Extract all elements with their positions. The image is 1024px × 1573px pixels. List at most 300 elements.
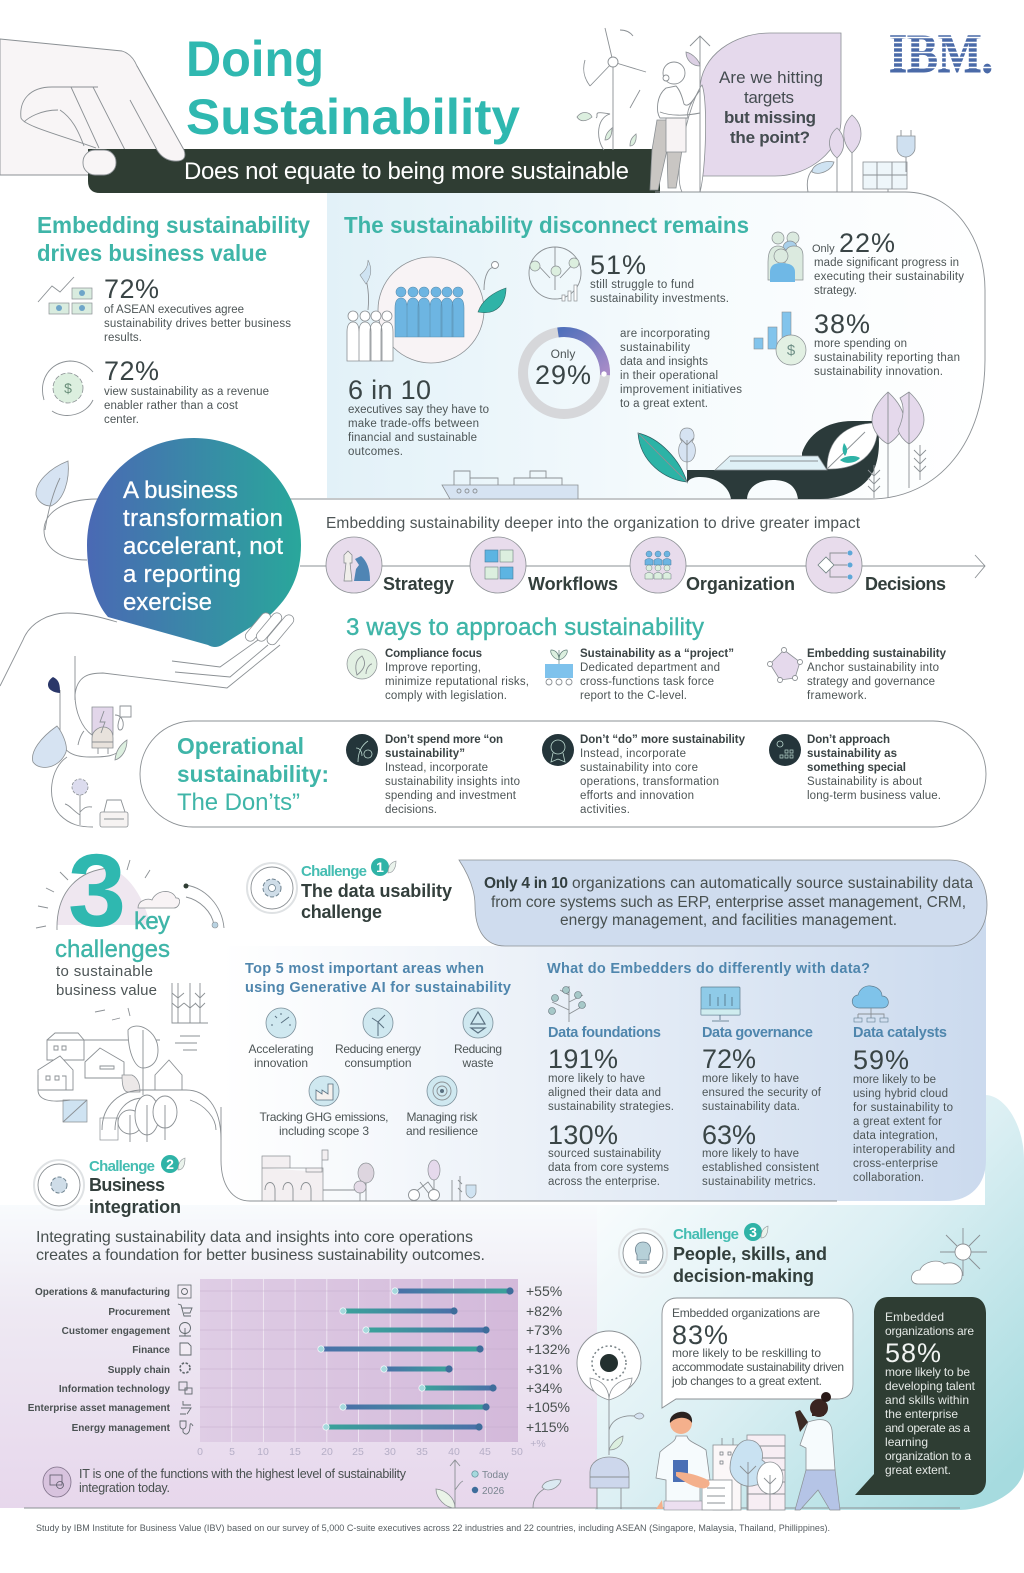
illustration: leaf on stem xyxy=(36,461,68,530)
speech bubble: 58% talent: learning xyxy=(885,1435,928,1449)
column: data foundations xyxy=(548,986,674,1188)
text: integrating sustainability data: Integrating sustainability data and insights into core operations xyxy=(36,1229,473,1246)
illustration: charger, plants and car xyxy=(32,656,131,827)
text: incorporating data and insights: are incorporating xyxy=(620,328,710,340)
icon: funding globe xyxy=(529,247,581,301)
heading: challenge 3: Challenge xyxy=(673,1226,739,1243)
heading: using Generative AI for sustainability xyxy=(245,980,511,996)
speech bubble: 58% talent xyxy=(855,1297,986,1495)
x axis: 30 xyxy=(384,1446,396,1458)
row: finance: +132% xyxy=(526,1341,570,1357)
row: supply chain: Supply chain xyxy=(108,1365,170,1376)
heading: challenge 2: Business xyxy=(89,1175,165,1195)
text: incorporating data and insights: improvement initiatives xyxy=(620,384,742,396)
item: reducing energy consumption: consumption xyxy=(344,1056,412,1070)
column: data catalysts: for sustainability to xyxy=(853,1102,953,1114)
column: data foundations: 130% xyxy=(548,1120,618,1150)
item: reducing waste: waste xyxy=(462,1056,494,1070)
illustration: man with tablet xyxy=(656,1412,710,1510)
x axis: 15 xyxy=(289,1446,301,1458)
heading: challenge 3: decision-making xyxy=(673,1266,814,1286)
x axis xyxy=(197,1438,546,1458)
illustration: open hand xyxy=(0,611,296,735)
icon: compliance xyxy=(347,649,377,679)
speech bubble: 83% reskilling: job changes to a great extent. xyxy=(671,1374,822,1388)
stat: 51% xyxy=(590,250,729,305)
illustration: flower and plug xyxy=(577,1331,644,1509)
column: data foundations: more likely to have xyxy=(548,1073,645,1085)
way: embedding sustainability: framework. xyxy=(807,690,867,702)
text: integrating sustainability data xyxy=(36,1229,485,1264)
x axis: 35 xyxy=(416,1446,428,1458)
column: data governance: established consistent xyxy=(702,1162,820,1174)
don't: spend more: sustainability” xyxy=(385,748,465,760)
heading: Embedding sustainability xyxy=(37,212,310,238)
don't: approach as special: something special xyxy=(807,762,906,774)
icon: project xyxy=(545,650,573,685)
heading xyxy=(245,961,511,996)
banner: subtitle xyxy=(83,149,660,193)
stat: 38%: sustainability reporting than xyxy=(814,352,960,364)
row: operations and manufacturing: +55% xyxy=(526,1283,562,1299)
don't: spend more xyxy=(346,734,520,816)
illustration: woman with tree xyxy=(650,36,710,192)
stat: 38%: more spending on xyxy=(814,338,907,350)
illustration: bridge, road and leaves xyxy=(638,392,926,499)
stat: 72% revenue enabler: 72% xyxy=(104,356,159,386)
column: data catalysts: cross-enterprise xyxy=(853,1158,938,1170)
callout: business transformation circle: exercise xyxy=(123,589,212,616)
heading: Operational xyxy=(177,733,304,759)
icon: revenue gear: $ xyxy=(64,380,72,396)
item: accelerating innovation xyxy=(248,1008,314,1070)
don't: spend more: sustainability insights into xyxy=(385,776,520,788)
callout: business transformation circle: A business xyxy=(123,477,238,504)
text: incorporating data and insights: in their operational xyxy=(620,370,718,382)
x axis: 50 xyxy=(511,1446,523,1458)
thumb overlap xyxy=(130,66,185,161)
step: decisions: Decisions xyxy=(865,574,946,594)
stat: 6 in 10 xyxy=(348,375,489,458)
illustration: village and trees xyxy=(38,983,221,1142)
column: data foundations: Data foundations xyxy=(548,1025,661,1041)
column: data foundations: 191% xyxy=(548,1044,618,1074)
speech bubble: 83% reskilling xyxy=(662,1298,853,1408)
row: finance: Finance xyxy=(132,1345,170,1356)
item: managing risk: and resilience xyxy=(406,1124,478,1138)
heading: challenge 1: challenge xyxy=(301,902,382,922)
stat: 51%: still struggle to fund xyxy=(590,279,694,291)
title: Sustainability xyxy=(186,89,520,145)
way: sustainability as a project: cross-functions task force xyxy=(580,676,714,688)
way: sustainability as a project xyxy=(545,648,734,702)
way: sustainability as a project: Dedicated department and xyxy=(580,662,720,674)
banner: subtitle: Does not equate to being more sustainable xyxy=(184,158,629,185)
illustration: executives xyxy=(347,257,506,363)
item: tracking GHG emissions xyxy=(260,1076,388,1138)
item: managing risk xyxy=(406,1076,478,1138)
stat: only 22% xyxy=(812,228,964,297)
heading: 3 key challenges: to sustainable xyxy=(56,963,153,980)
illustration: sunrise arc, cloud and rays xyxy=(36,860,224,930)
callout: business transformation circle xyxy=(87,438,301,647)
stat: 38%: sustainability innovation. xyxy=(814,366,943,378)
row: energy management xyxy=(72,1419,569,1435)
don't: do more: operations, transformation xyxy=(580,776,719,788)
icon: revenue gear xyxy=(42,361,93,415)
title xyxy=(186,31,520,145)
don't: approach as special: Sustainability is about xyxy=(807,776,923,788)
heading: Top 5 most important areas when xyxy=(245,961,484,977)
stat: 38% xyxy=(814,309,960,378)
speech bubble: 58% talent: the enterprise xyxy=(885,1407,958,1421)
callout: business transformation circle: accelerant, not xyxy=(123,533,283,560)
row: procurement: +82% xyxy=(526,1303,562,1319)
stat: 72% better results: 72% xyxy=(104,274,159,304)
don't: do more: sustainability into core xyxy=(580,762,698,774)
row: energy management: Energy management xyxy=(72,1423,171,1434)
column: data catalysts: a great extent for xyxy=(853,1116,942,1128)
heading: challenge 3 xyxy=(619,1223,827,1286)
icon: cloud xyxy=(852,986,888,1022)
icon: spending bars: $ xyxy=(787,342,796,359)
icon: spending bars xyxy=(754,312,806,365)
speech bubble: 58% talent: and skills within xyxy=(885,1393,969,1407)
column: data governance: sustainability data. xyxy=(702,1101,800,1113)
column: data foundations: across the enterprise. xyxy=(548,1176,660,1188)
section: the sustainability disconnect remains xyxy=(344,212,964,499)
column: data governance: more likely to have xyxy=(702,1148,799,1160)
speech bubble: 83% reskilling: 83% xyxy=(672,1320,728,1350)
stat: only 22%: executing their sustainability xyxy=(814,271,964,283)
heading: sustainability: xyxy=(177,761,329,787)
row: customer engagement: +73% xyxy=(526,1322,562,1338)
column: data foundations: data from core systems xyxy=(548,1162,669,1174)
column: data governance xyxy=(701,987,822,1188)
x axis: 20 xyxy=(321,1446,333,1458)
item: reducing waste xyxy=(454,1008,502,1070)
speech bubble: 58% talent: developing talent xyxy=(885,1379,976,1393)
row: supply chain: +31% xyxy=(526,1361,562,1377)
speech bubble: 58% talent: Embedded xyxy=(885,1310,944,1324)
illustration: buildings and trees xyxy=(702,1435,785,1510)
callout: only 4 in 10 xyxy=(459,860,987,946)
don't: do more: efforts and innovation xyxy=(580,790,694,802)
step: workflows xyxy=(470,537,618,594)
item: reducing energy consumption: Reducing energy xyxy=(335,1042,421,1056)
heading: challenge 2: Challenge xyxy=(89,1158,155,1175)
illustration: sun and cloud xyxy=(911,1228,987,1284)
speech bubble: 58% talent: organizations are xyxy=(885,1324,974,1338)
heading: 3 key challenges: business value xyxy=(56,982,157,999)
stat: 6 in 10: financial and sustainable xyxy=(348,432,477,444)
column: data governance: 63% xyxy=(702,1120,756,1150)
chart: sustainability integration today vs 2026 xyxy=(28,1279,570,1497)
item: tracking GHG emissions: Tracking GHG emissions, xyxy=(260,1110,388,1124)
section: what do embedders do differently xyxy=(547,961,955,1188)
way: compliance focus: comply with legislation. xyxy=(385,690,507,702)
column: data foundations: aligned their data and xyxy=(548,1087,661,1099)
row: enterprise asset management xyxy=(28,1399,570,1415)
speech bubble: 83% reskilling: more likely to be reskilling to xyxy=(672,1346,821,1360)
column: data governance: 72% xyxy=(702,1044,756,1074)
item: reducing energy consumption xyxy=(335,1008,421,1070)
bottom rule xyxy=(24,1507,960,1509)
way: compliance focus: Compliance focus xyxy=(385,648,482,660)
panel: data usability background xyxy=(222,915,986,1201)
heading: The Don’ts” xyxy=(177,789,300,816)
plot area xyxy=(200,1279,518,1442)
way: embedding sustainability xyxy=(768,648,947,702)
stat: 6 in 10: executives say they have to xyxy=(348,404,489,416)
speech bubble: are we hitting targets: targets xyxy=(744,88,794,107)
callout: IT integration xyxy=(43,1467,407,1497)
item: tracking GHG emissions: including scope 3 xyxy=(279,1124,369,1138)
step: decisions xyxy=(806,537,946,594)
x axis: 10 xyxy=(257,1446,269,1458)
speech bubble: 58% talent: great extent. xyxy=(885,1463,951,1477)
caption: Embedding sustainability deeper into the organization to drive greater impact xyxy=(326,515,861,532)
stat: only 22%: 22% xyxy=(839,228,895,258)
text: incorporating data and insights: sustainability xyxy=(620,342,690,354)
column: data catalysts: more likely to be xyxy=(853,1074,936,1086)
column: data governance: ensured the security of xyxy=(702,1087,822,1099)
speech bubble: 83% reskilling: Embedded organizations are xyxy=(672,1306,820,1320)
illustration: factory, tree and bicycle xyxy=(262,1150,476,1201)
heading: 3 key challenges: key xyxy=(134,908,170,935)
row: procurement xyxy=(108,1303,562,1319)
speech bubble: are we hitting targets: but missing xyxy=(724,108,816,127)
speech bubble: are we hitting targets: Are we hitting xyxy=(719,68,823,87)
way: sustainability as a project: report to the C-level. xyxy=(580,690,687,702)
x axis: +% xyxy=(530,1438,546,1450)
way: sustainability as a project: Sustainability as a “project” xyxy=(580,648,734,660)
column: data catalysts xyxy=(852,986,955,1184)
don't: spend more: Don’t spend more “on xyxy=(385,734,503,746)
heading: challenge 1 xyxy=(247,858,452,922)
callout: business transformation circle: transformation xyxy=(123,505,283,532)
text: incorporating data and insights xyxy=(620,328,742,410)
callout: only 4 in 10: from core systems such as ERP, enterprise asset management, CRM, xyxy=(491,894,966,911)
x axis: 25 xyxy=(352,1446,364,1458)
item: reducing waste: Reducing xyxy=(454,1042,502,1056)
don't: do more: activities. xyxy=(580,804,630,816)
heading: 3 key challenges: challenges xyxy=(55,936,170,963)
stat: 6 in 10: outcomes. xyxy=(348,446,403,458)
stat: 72% better results: results. xyxy=(104,332,142,344)
stat: 72% revenue enabler: center. xyxy=(104,414,139,426)
x axis: 0 xyxy=(197,1446,203,1458)
column: data foundations: sustainability strategies. xyxy=(548,1101,674,1113)
step: organization xyxy=(630,537,795,594)
callout: only 4 in 10: energy management, and facilities management. xyxy=(560,912,897,929)
stat: only 22%: Only xyxy=(812,243,835,255)
don't: spend more: decisions. xyxy=(385,804,437,816)
stat: only 22%: strategy. xyxy=(814,285,857,297)
text: integrating sustainability data: creates a foundation for better business sustainability outcomes. xyxy=(36,1247,485,1264)
speech bubble: 58% talent: more likely to be xyxy=(885,1365,970,1379)
heading: challenge 1: Challenge xyxy=(301,863,367,880)
ground line xyxy=(221,1107,837,1201)
don't: spend more: spending and investment xyxy=(385,790,517,802)
x axis: 5 xyxy=(229,1446,235,1458)
step: workflows: Workflows xyxy=(528,574,618,594)
heading: drives business value xyxy=(37,240,267,266)
panel: operational sustainability the don'ts xyxy=(140,721,986,827)
title: Doing xyxy=(186,31,324,87)
x axis: 45 xyxy=(479,1446,491,1458)
heading: challenge 3: 3 xyxy=(749,1224,757,1240)
way: compliance focus xyxy=(347,648,529,702)
speech bubble: are we hitting targets: the point? xyxy=(730,128,810,147)
icon: magnifier document xyxy=(43,1467,71,1497)
panel: bottom background left xyxy=(0,1205,597,1508)
chart: 29% donut xyxy=(523,332,607,414)
text: incorporating data and insights: to a great extent. xyxy=(620,398,708,410)
icon: monitor xyxy=(701,987,740,1021)
column: data governance: Data governance xyxy=(702,1025,813,1041)
row: procurement: Procurement xyxy=(108,1307,171,1318)
speech bubble: 58% talent: and operate as a xyxy=(885,1421,970,1435)
heading xyxy=(177,733,329,816)
way: compliance focus: Improve reporting, xyxy=(385,662,481,674)
step: strategy: Strategy xyxy=(383,574,454,594)
stat: 72% revenue enabler: view sustainability as a revenue xyxy=(104,386,269,398)
row: customer engagement xyxy=(62,1322,562,1338)
row: energy management: +115% xyxy=(526,1419,569,1435)
icon: people group xyxy=(768,232,803,282)
section: top 5 areas for generative AI xyxy=(245,961,511,1201)
panel: sustainability disconnect background xyxy=(327,192,985,498)
stat: 6 in 10: make trade-offs between xyxy=(348,418,479,430)
icon: network xyxy=(768,648,802,682)
illustration: wind turbine and plants xyxy=(577,28,646,150)
row: operations and manufacturing: Operations & manufacturing xyxy=(35,1287,170,1298)
panel: bottom background right xyxy=(595,1095,1024,1510)
column: data catalysts: Data catalysts xyxy=(853,1025,947,1041)
outline: disconnect panel border and path xyxy=(44,192,985,560)
speech bubble: 83% reskilling: accommodate sustainability driven xyxy=(672,1360,844,1374)
item: managing risk: Managing risk xyxy=(406,1110,478,1124)
column: data governance: more likely to have xyxy=(702,1073,799,1085)
row: enterprise asset management: Enterprise asset management xyxy=(28,1403,171,1414)
row: finance xyxy=(132,1341,570,1357)
row: information technology: Information technology xyxy=(59,1384,170,1395)
stat: 72% revenue enabler xyxy=(104,356,269,426)
row: enterprise asset management: +105% xyxy=(526,1399,570,1415)
stat: 51%: sustainability investments. xyxy=(590,293,729,305)
speech bubble: 58% talent: organization to a xyxy=(885,1449,971,1463)
arrow xyxy=(300,555,985,578)
stat: 72% better results: of ASEAN executives agree xyxy=(104,304,244,316)
icon: chart and money xyxy=(38,277,92,314)
text: incorporating data and insights: data and insights xyxy=(620,356,708,368)
illustration: leaves, plug and solar panel xyxy=(807,115,915,192)
item: accelerating innovation: Accelerating xyxy=(248,1042,314,1056)
speech bubble: 58% talent: 58% xyxy=(885,1338,941,1368)
column: data catalysts: using hybrid cloud xyxy=(853,1088,948,1100)
don't: approach as special xyxy=(769,734,941,802)
callout: IT integration: integration today. xyxy=(79,1481,170,1495)
stat: 72% better results: sustainability drives better business xyxy=(104,318,291,330)
don't: do more xyxy=(542,734,746,816)
callout: only 4 in 10: organizations can automatically source sustainability data xyxy=(572,875,973,892)
heading: challenge 2: integration xyxy=(89,1197,181,1217)
don't: approach as special: sustainability as xyxy=(807,748,897,760)
illustration: ship xyxy=(442,471,578,499)
column: data catalysts: collaboration. xyxy=(853,1172,924,1184)
stat: only 22%: made significant progress in xyxy=(814,257,959,269)
stat: 72% revenue enabler: enabler rather than a cost xyxy=(104,400,239,412)
callout: IT integration: IT is one of the functions with the highest level of sustainability xyxy=(79,1467,407,1481)
column: data catalysts: 59% xyxy=(853,1045,909,1075)
don't: approach as special: Don’t approach xyxy=(807,734,890,746)
step: organization: Organization xyxy=(686,574,795,594)
icon: tree diagram xyxy=(548,986,586,1022)
legend xyxy=(472,1470,509,1497)
speech bubble: are we hitting targets xyxy=(700,33,841,176)
heading: challenge 2 xyxy=(34,1155,185,1217)
don't: approach as special: long-term business value. xyxy=(807,790,941,802)
heading: The sustainability disconnect remains xyxy=(344,212,749,238)
way: embedding sustainability: Embedding sustainability xyxy=(807,648,947,660)
way: embedding sustainability: Anchor sustainability into xyxy=(807,662,939,674)
way: embedding sustainability: strategy and governance xyxy=(807,676,935,688)
logo: IBM: IBM. xyxy=(889,23,993,84)
footnote: Study by IBM Institute for Business Value (IBV) based on our survey of 5,000 C-suite executives across 22 industries and 22 countries, including ASEAN (Singapore, Malaysia, Thailand, Phillippines). xyxy=(36,1523,830,1533)
chart: 29% donut: Only xyxy=(551,347,575,361)
row: customer engagement: Customer engagement xyxy=(62,1326,171,1337)
column: data foundations: sourced sustainability xyxy=(548,1148,661,1160)
section: embedding sustainability drives business value xyxy=(37,212,310,426)
callout: only 4 in 10: Only 4 in 10 xyxy=(484,875,568,892)
stat: 72% better results xyxy=(104,274,291,344)
illustration: sprout with arrow xyxy=(436,1460,561,1508)
heading: 3 key challenges xyxy=(36,833,224,999)
way: compliance focus: minimize reputational risks, xyxy=(385,676,529,688)
stat: 51%: 51% xyxy=(590,250,646,280)
row: supply chain xyxy=(108,1361,562,1377)
heading: challenge 2: 2 xyxy=(166,1156,174,1172)
row: operations and manufacturing xyxy=(35,1283,562,1299)
heading: 3 key challenges: 3 xyxy=(68,833,126,948)
don't: spend more: Instead, incorporate xyxy=(385,762,488,774)
heading: What do Embedders do differently with data? xyxy=(547,961,870,977)
row: information technology: +34% xyxy=(526,1380,562,1396)
legend: 2026 xyxy=(482,1486,505,1497)
column: data catalysts: data integration, xyxy=(853,1130,938,1142)
item: accelerating innovation: innovation xyxy=(254,1056,308,1070)
row: information technology xyxy=(59,1380,562,1396)
callout: business transformation circle: a reporting xyxy=(123,561,241,588)
stat: 6 in 10: 6 in 10 xyxy=(348,375,431,405)
illustration: woman with phone xyxy=(795,1392,840,1510)
heading: 3 ways to approach sustainability: 3 ways to approach sustainability xyxy=(346,614,704,641)
heading: challenge 1: The data usability xyxy=(301,881,452,901)
timeline: embedding sustainability deeper xyxy=(300,515,985,594)
step: strategy xyxy=(326,537,454,594)
legend: Today xyxy=(482,1470,509,1481)
stat: 38%: 38% xyxy=(814,309,870,339)
chart: 29% donut: 29% xyxy=(535,360,591,390)
column: data catalysts: interoperability and xyxy=(853,1144,955,1156)
heading: challenge 1: 1 xyxy=(376,859,384,875)
heading xyxy=(37,212,310,266)
illustration: hand holding banner xyxy=(0,39,185,175)
don't: do more: Don’t “do” more sustainability xyxy=(580,734,746,746)
don't: do more: Instead, incorporate xyxy=(580,748,686,760)
x axis: 40 xyxy=(448,1446,460,1458)
